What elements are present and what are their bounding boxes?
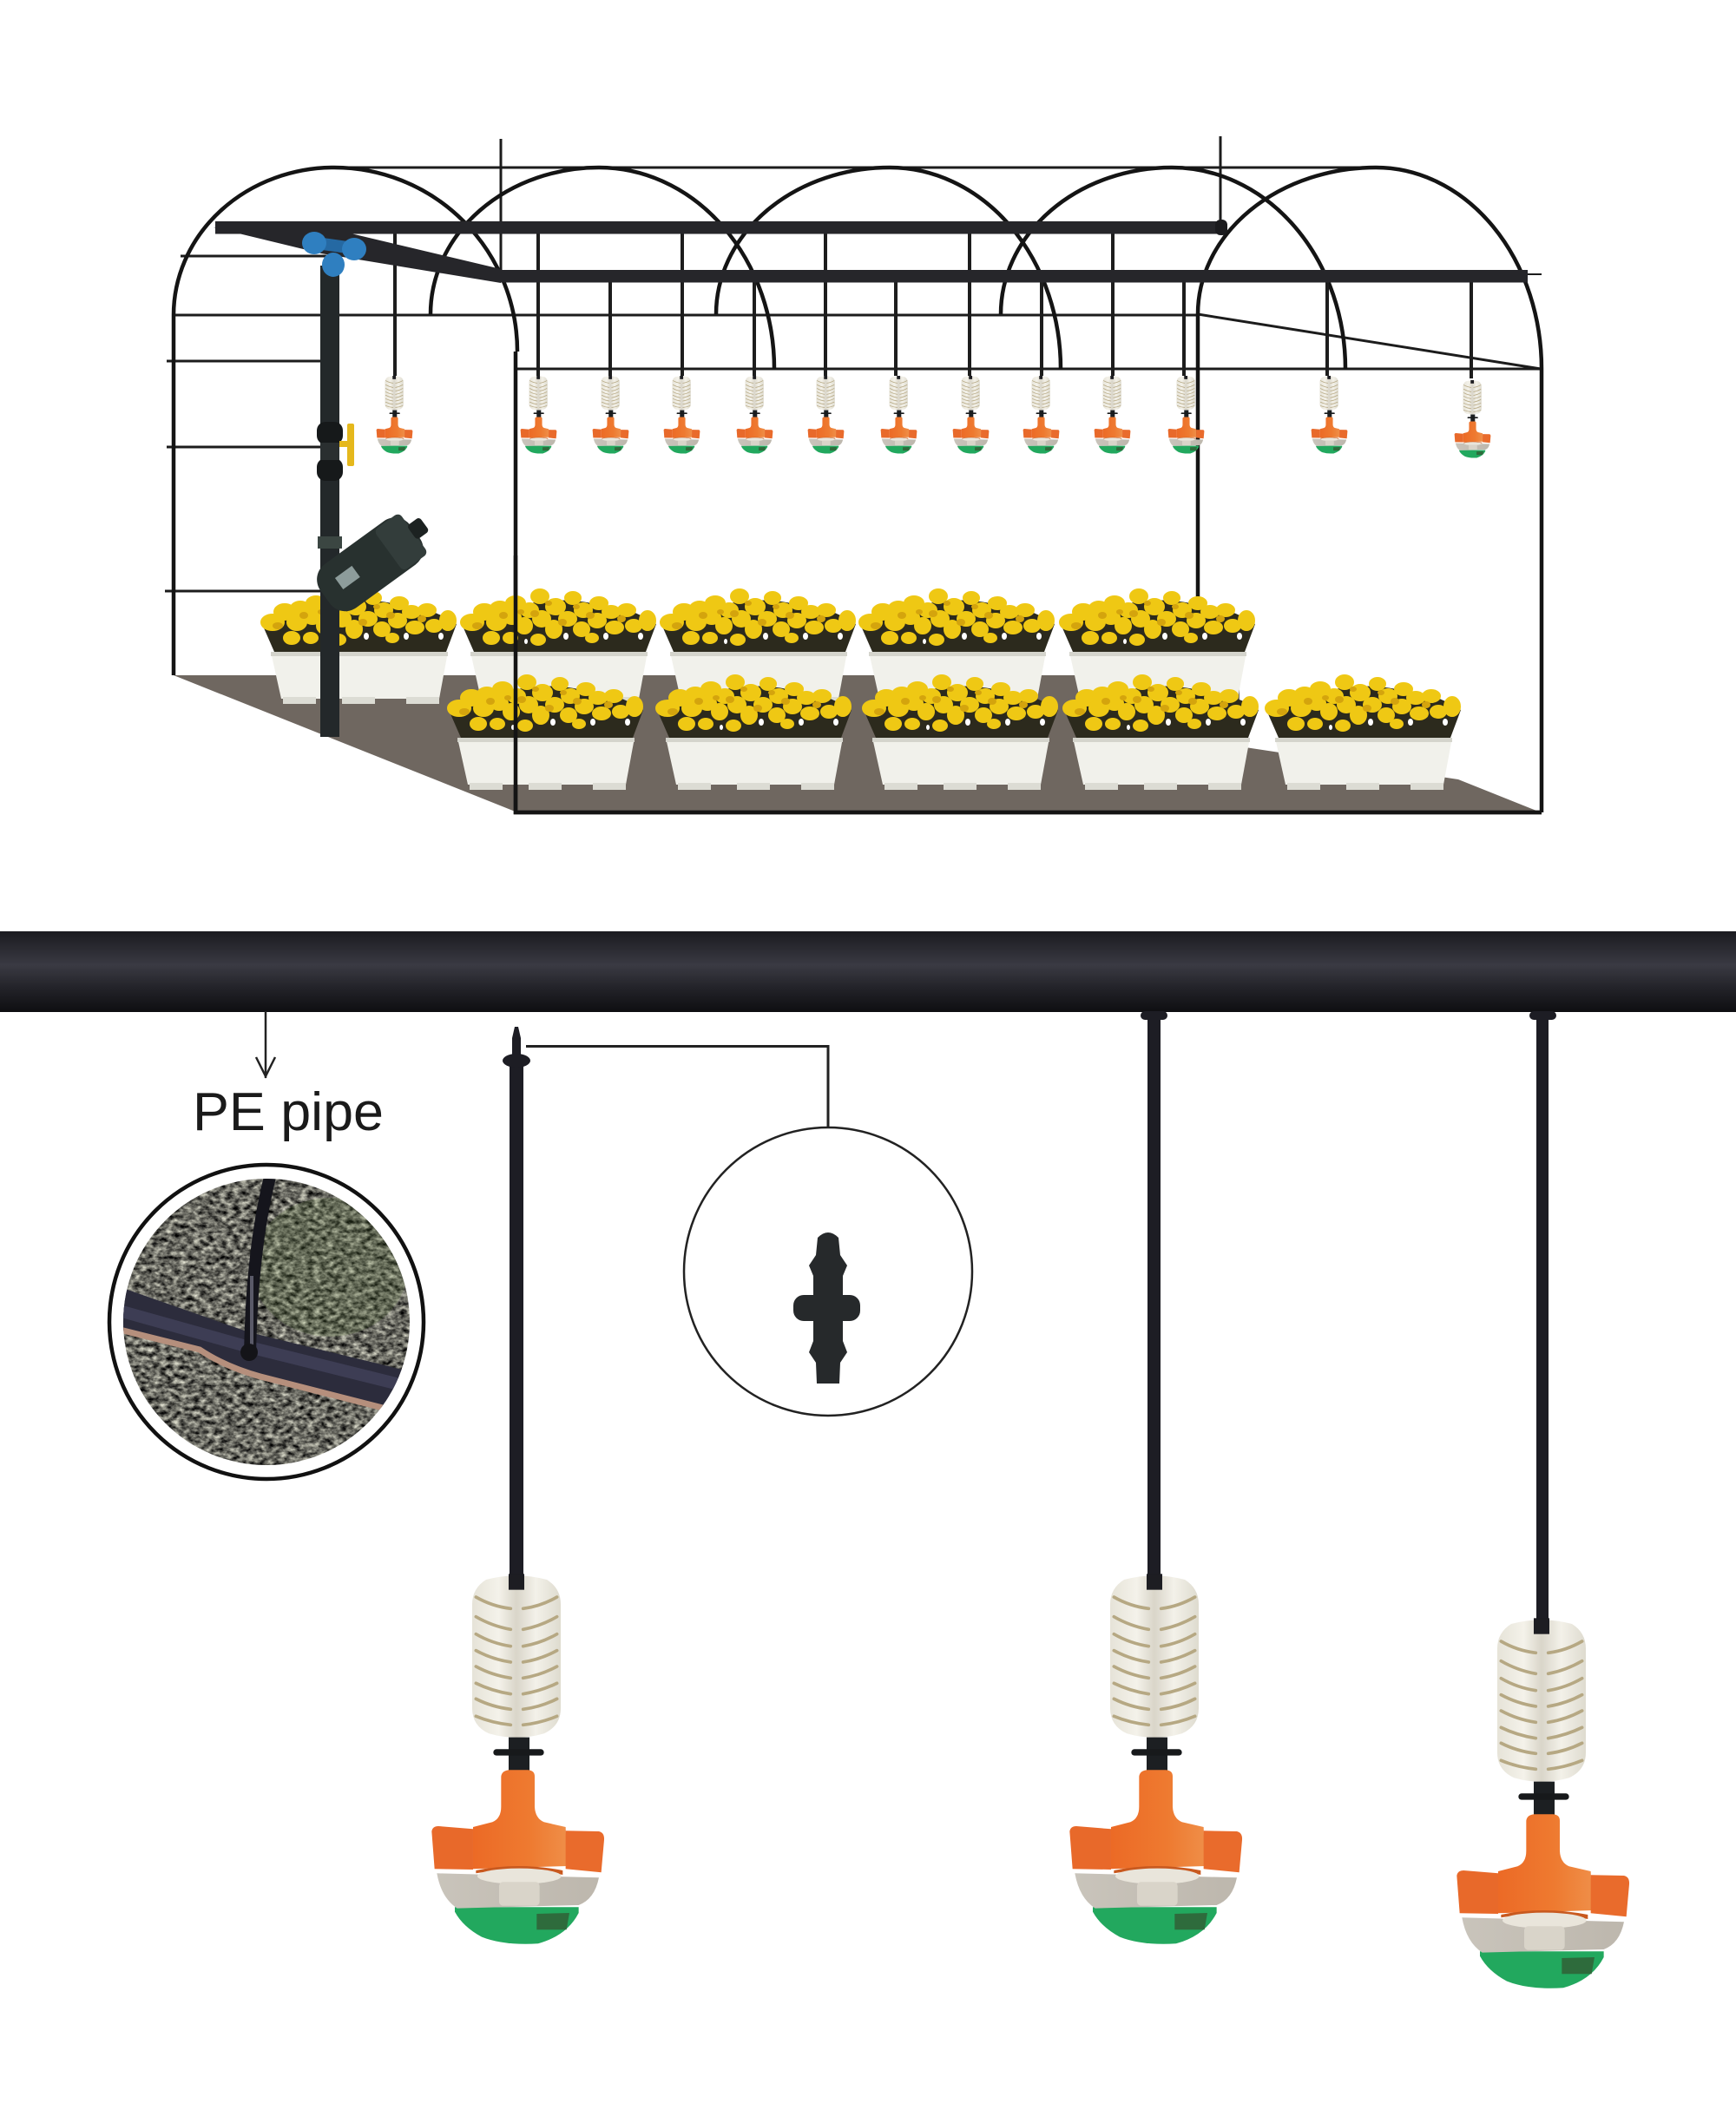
arrow to PE pipe label (256, 1011, 275, 1078)
lower PE pipe (214, 227, 1528, 283)
upper PE pipe (215, 220, 1227, 235)
disc filter (309, 503, 441, 619)
tunnel frame: horizontal bars (165, 136, 1542, 591)
sprinkler assembly 3 (1457, 1011, 1629, 1988)
flower planters: front row (449, 676, 1461, 790)
flower planters: back row (262, 590, 1255, 704)
inset photo: PE pipe with drip tube on grass (109, 1165, 424, 1479)
label: PE pipe: PE pipe (193, 1082, 384, 1142)
tunnel frame: arches (174, 168, 1542, 812)
sprinkler assembly 2 (1069, 1011, 1242, 1944)
callout line to connector detail (526, 1047, 828, 1127)
large PE pipe (0, 931, 1736, 1012)
frame lines in front of plants (516, 555, 1542, 812)
blue tee connectors (302, 232, 366, 277)
small sprinkler row (377, 376, 1490, 458)
greenhouse scene (165, 136, 1542, 812)
connector detail circle (684, 1127, 972, 1416)
vertical main pipe (320, 266, 339, 737)
hanging drop lines (395, 233, 1471, 378)
sprinkler assembly 1 (431, 1027, 604, 1944)
ball valve (317, 422, 354, 481)
ground floor (174, 675, 1541, 812)
